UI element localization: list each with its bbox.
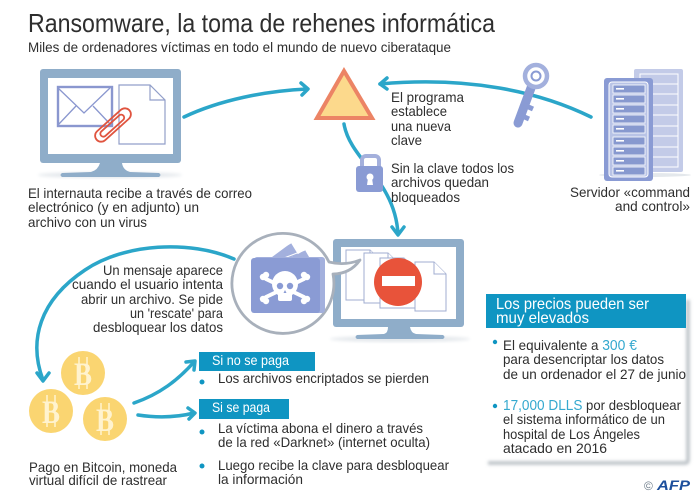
text: new key [391, 89, 464, 148]
icon: bitcoin coins [29, 351, 127, 441]
icon: stacked documents [346, 250, 446, 311]
icon: folder [251, 243, 325, 313]
title: Ransomware, la toma de rehenes informática [28, 8, 495, 38]
icon: warning triangle [317, 71, 372, 118]
text: ransom message: Un mensaje aparece [103, 262, 223, 278]
back server [634, 69, 683, 172]
icon: attached document [119, 85, 165, 144]
icon: bitcoin coins: B [74, 357, 92, 393]
panel heading [486, 294, 686, 328]
icon: servers [599, 69, 691, 181]
arrow: server to warning [380, 78, 591, 117]
text: new key: El programa [391, 89, 464, 105]
label: paying: Si se paga [212, 399, 270, 415]
text: ransom message: cuando el usuario intenta [72, 276, 223, 292]
text: ransom message: abrir un archivo. Se pide [81, 291, 223, 307]
text: new key: establece [391, 103, 447, 119]
text: receive key [200, 457, 449, 487]
icon: envelope [58, 87, 112, 126]
caption: bitcoin [29, 459, 177, 488]
icon: bitcoin coins: B [96, 403, 114, 439]
caption: email step: electrónico (y en adjunto) un [28, 199, 199, 215]
caption: email step: El internauta recibe a través de correo [28, 185, 252, 201]
arrow: computer to warning [184, 83, 308, 117]
text: ransom message [72, 262, 223, 335]
credit: AFP [644, 477, 691, 493]
caption: server [570, 184, 690, 214]
panel: prices [486, 294, 688, 463]
price item: 300 euros: de un ordenador el 27 de junio [503, 366, 686, 382]
text: ransom message: un 'rescate' para [130, 305, 223, 321]
price item: 17,000 dollars: hospital de Los Ángeles [503, 426, 640, 442]
arrow: warning to infected computer [344, 124, 404, 235]
icon: no entry sign [374, 258, 422, 306]
panel heading: muy elevados [496, 310, 589, 327]
text: darknet payment: La víctima abona el dinero a través [218, 420, 423, 436]
arrow: to not paying [134, 361, 195, 403]
icon: computer with infected email [38, 69, 182, 178]
icon: padlock [356, 156, 383, 192]
price item: 17,000 dollars: 17,000 DLLS por desbloquear [503, 397, 681, 414]
caption: server: and control» [615, 198, 690, 214]
arrow: ransom message to bitcoin [37, 247, 234, 381]
price item: 300 euros: El equivalente a 300 € [503, 337, 637, 354]
credit: AFP: AFP [656, 477, 691, 493]
icon: paperclip [93, 106, 133, 144]
label: paying [199, 399, 289, 419]
price item: 17,000 dollars [493, 397, 681, 456]
text: new key: una nueva [391, 118, 451, 134]
text: locked files: archivos quedan [391, 174, 489, 190]
text: locked files: bloqueados [391, 189, 460, 205]
price item: 300 euros [493, 337, 686, 382]
caption: server: Servidor «command [570, 184, 690, 200]
front server [604, 78, 653, 181]
icon: locked computer [330, 239, 470, 342]
text: locked files [391, 160, 514, 205]
credit: AFP: © [644, 479, 653, 493]
text: receive key: Luego recibe la clave para desbloquear [218, 457, 449, 473]
icon: bitcoin coins: B [42, 395, 60, 431]
label: not paying: Si no se paga [212, 352, 289, 368]
text: locked files: Sin la clave todos los [391, 160, 514, 176]
subtitle: Miles de ordenadores víctimas en todo el mundo de nuevo ciberataque [28, 39, 451, 55]
caption: email step [28, 185, 252, 230]
icon: skull and crossbones [260, 271, 310, 304]
arrow: to paying [138, 408, 195, 419]
caption: bitcoin: Pago en Bitcoin, moneda [29, 459, 177, 475]
text: ransom message: desbloquear los datos [93, 319, 223, 335]
speech bubble: skull warning [232, 233, 360, 333]
text: darknet payment: de la red «Darknet» (internet oculta) [218, 434, 430, 450]
text: darknet payment [200, 420, 430, 450]
icon: key [518, 65, 547, 123]
price item: 300 euros: para desencriptar los datos [503, 351, 664, 367]
caption: email step: archivo con un virus [28, 214, 147, 230]
text: receive key: la información [218, 471, 303, 487]
caption: bitcoin: virtual difícil de rastrear [29, 472, 167, 488]
text: new key: clave [391, 132, 422, 148]
panel heading: Los precios pueden ser [496, 296, 650, 313]
price item: 17,000 dollars: atacado en 2016 [503, 440, 607, 456]
text: files lost: Los archivos encriptados se pierden [218, 370, 429, 386]
label: not paying [199, 352, 315, 371]
price item: 17,000 dollars: el sistema informático de un [503, 411, 665, 427]
